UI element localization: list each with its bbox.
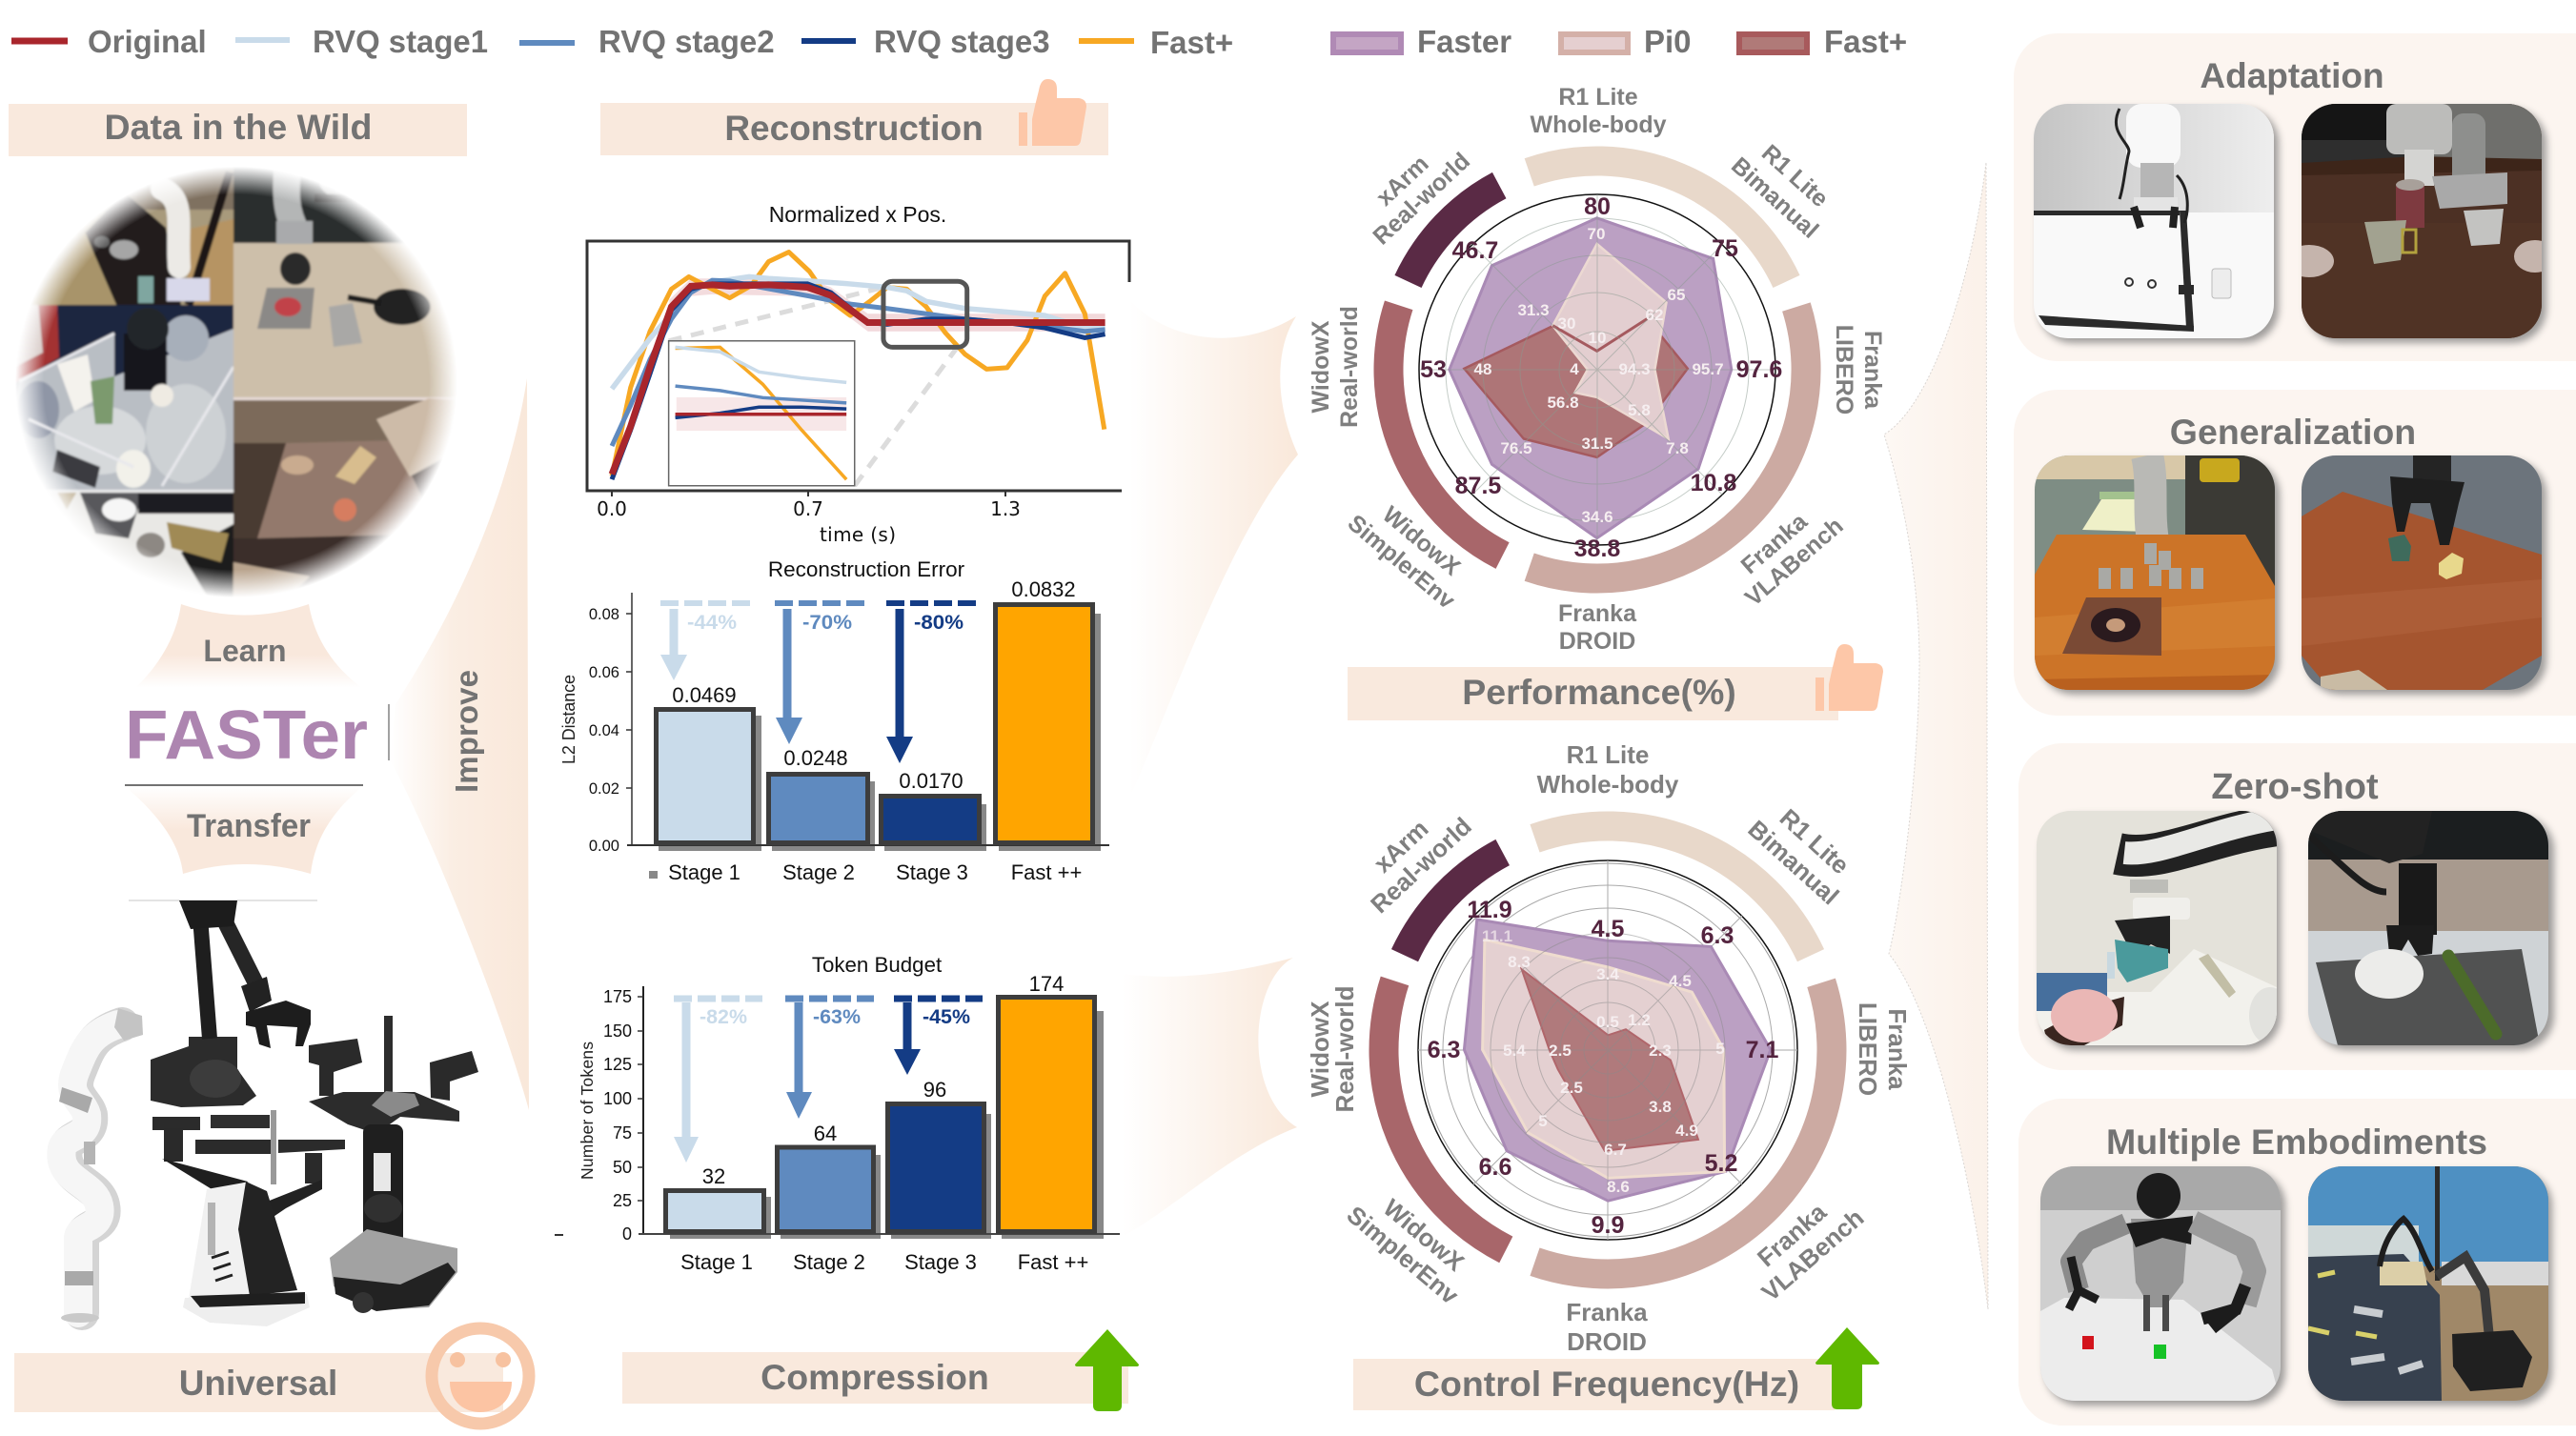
panel: Generalization: Generalization <box>2170 412 2416 452</box>
panel: Zero-shot <box>2018 743 2576 1070</box>
bar chart: Token Budget <box>555 953 1120 1274</box>
radar chart: Performance: 10 <box>1589 329 1606 347</box>
robot: black arm <box>151 900 311 1107</box>
bar chart: Reconstruction Error: 0.00 <box>589 838 619 855</box>
axis labels: WidowX <box>1378 1193 1471 1277</box>
bar chart: Reconstruction Error: 0.0832 <box>1011 577 1076 601</box>
legend: radar methods <box>1333 24 1907 59</box>
heading: Universal <box>14 1353 503 1412</box>
line chart: Normalized x Pos <box>587 202 1129 546</box>
axis labels: Franka <box>1859 331 1886 410</box>
bar chart: Token Budget: 25 <box>613 1191 632 1210</box>
bar chart: Token Budget: 175 <box>603 987 632 1006</box>
radar chart: Control Frequency: 4.5 <box>1669 972 1692 990</box>
title: FASTer: FASTer <box>125 698 368 774</box>
bar chart: Token Budget: 96 <box>923 1078 946 1102</box>
bar chart: Reconstruction Error <box>559 557 1109 884</box>
radar chart: Performance: 97.6 <box>1736 356 1782 383</box>
legend: reconstruction lines: Original <box>88 24 207 59</box>
axis labels: Franka <box>1752 1197 1832 1272</box>
arrow: stage 1 reduction: -44% <box>687 612 737 634</box>
panel: Multiple Embodiments <box>2018 1099 2576 1426</box>
panel: Adaptation <box>2014 33 2576 361</box>
arrow: stage 2 reduction: -70% <box>802 612 852 634</box>
legend: reconstruction lines <box>11 24 1233 60</box>
bar chart: Reconstruction Error: 0.06 <box>589 664 619 681</box>
heading: Performance(%): Performance(%) <box>1462 672 1736 712</box>
axis labels: Real-world <box>1330 986 1359 1112</box>
radar chart: Control Frequency: 7.1 <box>1746 1037 1778 1063</box>
axis labels: Whole-body <box>1537 770 1679 799</box>
radar chart: Performance: 75 <box>1712 235 1738 262</box>
bar chart: Reconstruction Error: Stage 2 <box>782 860 855 884</box>
radar chart: Control Frequency: 4.5 <box>1592 916 1624 942</box>
radar chart: Control Frequency: 6.3 <box>1701 922 1734 949</box>
axis labels: SimplerEnv <box>1343 510 1460 615</box>
axis labels: Franka <box>1736 508 1814 579</box>
axis labels: Bimanual <box>1726 152 1824 244</box>
radar chart: Control Frequency: 1.2 <box>1628 1011 1651 1029</box>
series: Faster <box>1464 920 1771 1201</box>
bar: stages <box>665 997 1094 1231</box>
photo: simulated mugs on table <box>2284 104 2556 343</box>
robot: white arm <box>59 1008 143 1323</box>
connector: wedge to performance radar <box>1129 299 1298 799</box>
bar chart: Token Budget: 64 <box>814 1122 837 1145</box>
panel: Adaptation: Adaptation <box>2200 56 2384 95</box>
bar chart: Token Budget: 75 <box>613 1123 632 1143</box>
bar chart: Token Budget: Fast ++ <box>1018 1250 1088 1274</box>
photo: humanoid simulation <box>2040 1166 2285 1406</box>
legend: radar methods: Faster <box>1417 24 1511 59</box>
photo: gripper and cubes <box>2302 455 2546 695</box>
axis labels: Real-world <box>1336 306 1363 428</box>
bar chart: Reconstruction Error: Fast ++ <box>1011 860 1082 884</box>
axis labels: WidowX <box>1308 320 1334 414</box>
bar chart: Token Budget: 0 <box>622 1224 632 1244</box>
axis labels: SimplerEnv <box>1342 1201 1465 1310</box>
radar chart: Control Frequency: 2.5 <box>1549 1042 1572 1060</box>
shape: Learn arrow: Learn <box>203 634 287 668</box>
heading: Control Frequency(Hz) <box>1353 1327 1879 1410</box>
axis labels: R1 Lite <box>1558 84 1638 111</box>
radar chart: Control Frequency: 11.9 <box>1467 897 1512 923</box>
photo collage: data in the wild <box>0 162 462 610</box>
arrow: stage 3 reduction: -80% <box>914 612 963 634</box>
radar chart: Performance: 31.5 <box>1581 435 1613 453</box>
icon: smiley face <box>432 1328 529 1424</box>
photo: arm with drawer <box>2037 811 2291 1050</box>
radar chart: Control Frequency: 5.2 <box>1705 1150 1737 1177</box>
axis labels: R1 Lite <box>1756 139 1834 212</box>
radar chart: Control Frequency: 8.6 <box>1607 1178 1630 1196</box>
icon: green up arrow <box>1815 1327 1879 1409</box>
robots: universal embodiments <box>59 900 478 1326</box>
axis labels: VLABench <box>1740 513 1849 612</box>
heading: Reconstruction: Reconstruction <box>724 109 984 148</box>
axis labels: Franka <box>1883 1008 1912 1090</box>
radar chart: Control Frequency: 2.5 <box>1560 1079 1583 1097</box>
icon: thumbs up <box>1815 644 1883 711</box>
connector: wedge to control frequency radar <box>1122 958 1297 1237</box>
radar chart: Performance: 94.3 <box>1618 360 1651 378</box>
bar chart: Reconstruction Error: 0.02 <box>589 780 619 798</box>
radar chart: Control Frequency: 4.9 <box>1675 1122 1698 1140</box>
radar chart: Performance: 4 <box>1570 360 1579 378</box>
axis labels: Real-world <box>1365 812 1477 919</box>
arrow: stage 2 compression: -63% <box>813 1006 861 1028</box>
radar chart: Control Frequency: 2.3 <box>1649 1042 1672 1060</box>
bar: shadows <box>659 614 1101 851</box>
series: Fast+ <box>1464 318 1688 457</box>
radar chart: Performance: 87.5 <box>1455 473 1501 499</box>
radar chart: Performance: 53 <box>1420 356 1447 383</box>
heading: Compression: Compression <box>761 1357 989 1397</box>
radar chart: Control Frequency: 3.8 <box>1649 1098 1672 1116</box>
bar chart: Reconstruction Error: 0.0469 <box>672 683 737 707</box>
series: Pi0 <box>1483 940 1725 1178</box>
legend: reconstruction lines: RVQ stage2 <box>598 24 775 59</box>
radar chart: Performance: 34.6 <box>1581 508 1613 526</box>
heading: Performance(%) <box>1348 644 1883 720</box>
legend: reconstruction lines: Fast+ <box>1150 25 1233 60</box>
heading: Compression <box>622 1329 1139 1411</box>
radar chart: Performance: 7.8 <box>1666 439 1689 457</box>
legend: reconstruction lines: RVQ stage3 <box>874 24 1050 59</box>
bar chart: Reconstruction Error: L2 Distance <box>559 675 578 764</box>
axis labels: VLABench <box>1756 1203 1869 1306</box>
axis labels <box>1306 740 1912 1356</box>
axis labels: Whole-body <box>1530 111 1667 138</box>
radar chart: Control Frequency: 5 <box>1538 1112 1548 1130</box>
radar chart: Performance: 80 <box>1584 193 1611 220</box>
bar chart: Token Budget: 150 <box>603 1021 632 1041</box>
radar chart: Control Frequency <box>1306 740 1912 1356</box>
panel: Zero-shot: Zero-shot <box>2211 767 2379 807</box>
shape: Learn arrow <box>135 604 362 688</box>
bar chart: Reconstruction Error: Stage 1 <box>668 860 740 884</box>
legend: radar methods: Fast+ <box>1824 24 1907 59</box>
radar chart: Control Frequency: 0.5 <box>1596 1013 1619 1031</box>
axis labels: DROID <box>1567 1327 1647 1356</box>
bar chart: Reconstruction Error: Reconstruction Error <box>768 557 965 581</box>
radar chart: Performance: 31.3 <box>1517 301 1550 319</box>
axis labels: LIBERO <box>1854 1002 1882 1096</box>
radar ring segments <box>1389 161 1806 578</box>
radar chart: Performance: 70 <box>1588 225 1605 243</box>
axis labels: Real-world <box>1368 148 1475 251</box>
series: Faster <box>1450 218 1732 538</box>
bar chart: Token Budget: Number of Tokens <box>578 1042 597 1180</box>
legend: radar methods: Pi0 <box>1644 24 1692 59</box>
bar chart: Reconstruction Error: Stage 3 <box>896 860 968 884</box>
radar chart: Performance: 95.7 <box>1692 360 1724 378</box>
radar chart: Control Frequency: 6.7 <box>1604 1141 1627 1159</box>
radar chart: Control Frequency: 5.4 <box>1503 1042 1526 1060</box>
radar chart: Performance: 46.7 <box>1452 237 1498 264</box>
line chart: Normalized x Pos: 1.3 <box>990 497 1021 520</box>
arrow: stage 3 compression: -45% <box>923 1006 970 1028</box>
axis labels: xArm <box>1371 151 1434 212</box>
arrow: stage 3 reduction <box>886 603 976 763</box>
arrow: stage 2 reduction <box>775 603 864 744</box>
radar chart: Performance: 62 <box>1646 306 1663 324</box>
heading: Control Frequency(Hz): Control Frequency(Hz) <box>1414 1364 1799 1404</box>
radar chart: Control Frequency: 11.1 <box>1482 927 1512 945</box>
axis labels: R1 Lite <box>1567 740 1649 769</box>
connector: improve crescent <box>390 378 529 1110</box>
radar chart: Control Frequency: 6.3 <box>1428 1037 1460 1063</box>
axis labels: WidowX <box>1377 501 1466 581</box>
axis labels: Franka <box>1558 600 1637 627</box>
line chart: Normalized x Pos: Normalized x Pos. <box>769 202 946 227</box>
line chart: Normalized x Pos: 0.0 <box>597 497 627 520</box>
icon: thumbs up <box>1019 79 1086 146</box>
bar chart: Reconstruction Error: 0.04 <box>589 722 619 739</box>
bar chart: Reconstruction Error: 0.0248 <box>783 746 848 770</box>
axis labels: DROID <box>1559 628 1635 655</box>
icon: green up arrow <box>1075 1329 1139 1411</box>
radar chart: Control Frequency: 9.9 <box>1592 1212 1624 1239</box>
axis labels: WidowX <box>1306 1001 1334 1097</box>
radar chart: Performance <box>1308 84 1886 655</box>
photo: mobile robot beside bed <box>2308 1166 2552 1406</box>
radar chart: Control Frequency: 8.3 <box>1508 953 1531 971</box>
radar chart: Performance: 5.8 <box>1628 401 1651 419</box>
heading: Data in the Wild: Data in the Wild <box>105 107 372 147</box>
radar chart: Performance: 30 <box>1558 314 1575 333</box>
radar chart: Performance: 76.5 <box>1500 439 1532 457</box>
heading: Universal: Universal <box>179 1364 337 1403</box>
line chart: Normalized x Pos: 0.7 <box>793 497 823 520</box>
shape: Transfer arrow: Transfer <box>187 808 311 844</box>
axis labels: xArm <box>1368 814 1434 879</box>
bar chart: Token Budget: 100 <box>603 1089 632 1108</box>
bar chart: Reconstruction Error: 0.0170 <box>899 769 963 793</box>
arrow: stage 1 reduction <box>660 603 752 680</box>
radar chart: Performance: 10.8 <box>1691 470 1736 496</box>
connector: right side shape toward task panels <box>1884 163 1988 1309</box>
bar chart: Token Budget: Stage 1 <box>680 1250 753 1274</box>
line chart: Normalized x Pos: time (s) <box>820 523 896 546</box>
arrow: stage 2 compression <box>785 999 874 1119</box>
legend: reconstruction lines: RVQ stage1 <box>313 24 488 59</box>
radar chart: Performance: 38.8 <box>1574 536 1620 562</box>
radar chart: Performance: 56.8 <box>1547 394 1579 412</box>
radar chart: Performance: 65 <box>1668 286 1685 304</box>
radar chart: Control Frequency: 5 <box>1715 1040 1725 1058</box>
heading: Reconstruction <box>600 79 1108 155</box>
bar chart: Reconstruction Error: 0.08 <box>589 606 619 623</box>
panel: Generalization <box>2014 390 2576 716</box>
label: Improve: Improve <box>449 670 484 793</box>
radar chart: Performance: 48 <box>1474 360 1491 378</box>
arrow: stage 1 compression <box>674 999 762 1163</box>
arrow: stage 1 compression: -82% <box>700 1006 747 1028</box>
axis labels: R1 Lite <box>1775 803 1855 880</box>
bar chart: Token Budget: 174 <box>1029 972 1064 996</box>
radar chart: Control Frequency: 3.4 <box>1596 965 1619 983</box>
robot: R1 Lite <box>309 1016 478 1313</box>
axis labels: Franka <box>1566 1298 1648 1326</box>
radar chart: Control Frequency: 6.6 <box>1479 1154 1511 1181</box>
heading: Data in the Wild <box>9 104 467 156</box>
bar chart: Token Budget: Stage 3 <box>904 1250 977 1274</box>
bar chart: Token Budget: 125 <box>603 1055 632 1074</box>
axis labels: LIBERO <box>1831 325 1857 415</box>
bar chart: Token Budget: Token Budget <box>812 953 943 977</box>
panel: Multiple Embodiments: Multiple Embodiments <box>2106 1122 2487 1162</box>
series: Pi0 <box>1552 244 1669 438</box>
axis labels: Bimanual <box>1742 815 1845 910</box>
bar: stages <box>656 604 1092 842</box>
radar ring segments <box>1384 826 1832 1274</box>
photo: card scene on wood table <box>2035 455 2280 695</box>
photo: gripper over basket <box>2308 811 2554 1050</box>
bar chart: Token Budget: 50 <box>613 1158 632 1177</box>
arrow: stage 3 compression <box>894 999 983 1075</box>
bar: shadows <box>670 1011 1104 1239</box>
axis labels <box>1308 84 1886 655</box>
robot: Cobot Magic <box>152 1110 345 1326</box>
shape: Transfer arrow <box>125 786 363 874</box>
series: Fast+ <box>1522 969 1698 1151</box>
bar chart: Token Budget: 32 <box>702 1164 725 1188</box>
bar chart: Token Budget: Stage 2 <box>793 1250 865 1274</box>
photo: grayscale real-world arm <box>2034 104 2279 343</box>
